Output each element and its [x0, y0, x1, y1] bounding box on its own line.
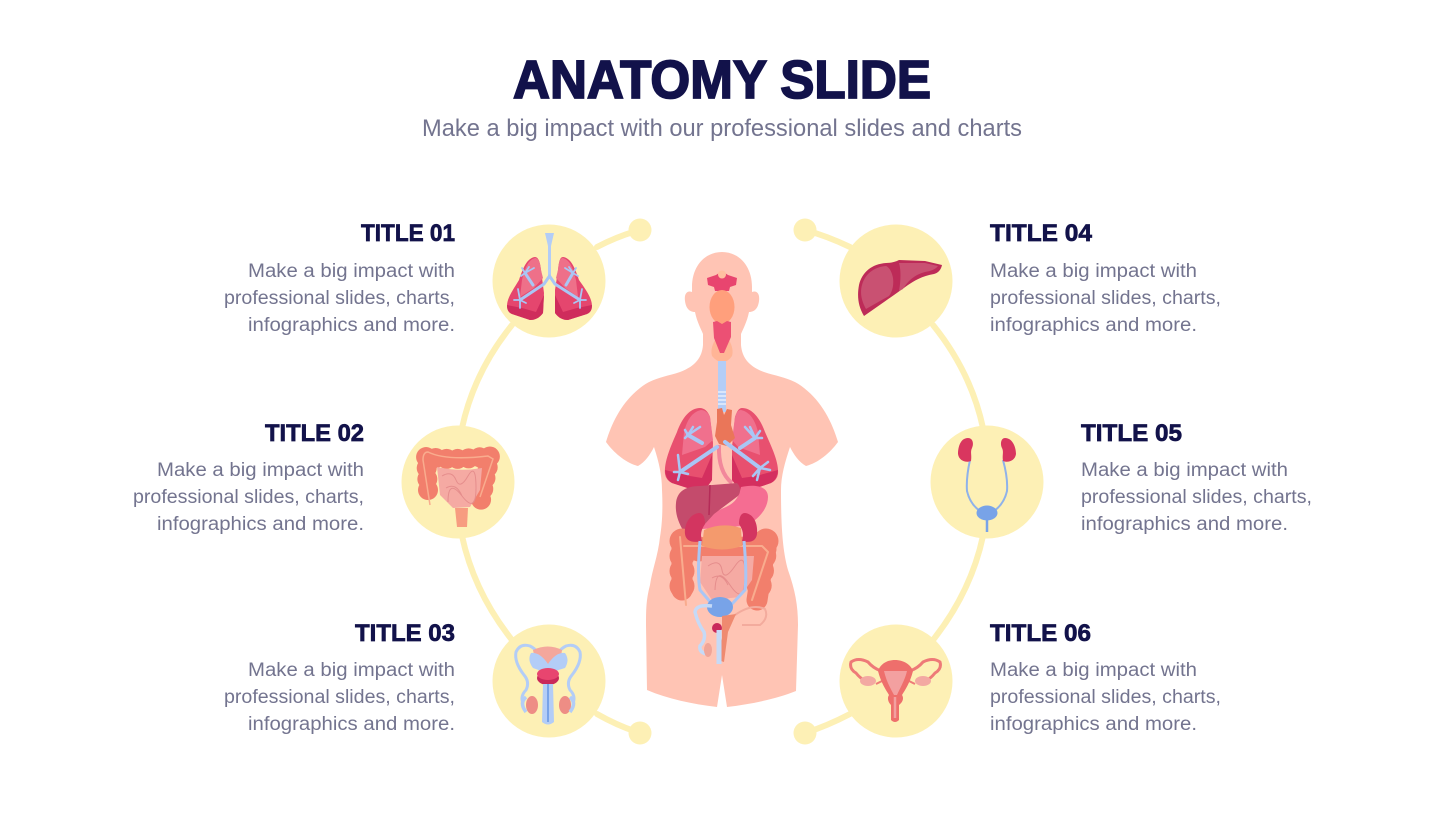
item 01 text: Make a big impact with: [248, 261, 455, 282]
item 02 text: [133, 420, 364, 535]
item 04: liver: [840, 224, 952, 338]
ureters: [698, 541, 746, 604]
central anatomy figure: [606, 252, 838, 707]
icon: uterus: [851, 660, 940, 722]
item 01 text: professional slides, charts,: [224, 288, 455, 309]
badge 03: [492, 624, 606, 738]
pituitary gland: [707, 270, 737, 291]
item 05 text: TITLE 05: [1081, 420, 1182, 447]
item 02: colon: [402, 426, 514, 538]
item 06 text: [990, 620, 1221, 735]
badge 04: [840, 224, 952, 338]
item 04 text: infographics and more.: [990, 315, 1197, 336]
item 05 text: infographics and more.: [1081, 514, 1288, 535]
item 04 text: [990, 220, 1221, 336]
icon: lungs: [507, 233, 592, 320]
pancreas: [702, 525, 742, 550]
item 05 text: professional slides, charts,: [1081, 487, 1312, 508]
item 04 text: TITLE 04: [990, 220, 1093, 247]
body silhouette: [606, 252, 838, 707]
item 03 text: [224, 620, 455, 735]
badge 05: [930, 426, 1044, 538]
aorta: [719, 445, 732, 483]
item 01 text: infographics and more.: [248, 315, 455, 336]
item 06 text: professional slides, charts,: [990, 687, 1221, 708]
small intestine: [700, 556, 754, 600]
subtitle: Make a big impact with our professional slides and charts: [422, 115, 1022, 142]
icon: male reproductive organs: [516, 645, 580, 724]
item 03: male reproductive system: [492, 624, 606, 738]
item 06 text: infographics and more.: [990, 714, 1197, 735]
item 01 text: TITLE 01: [361, 220, 455, 247]
trachea: [718, 361, 726, 412]
icon: intestines: [423, 452, 493, 527]
badge 06: [840, 624, 952, 738]
item 03 text: professional slides, charts,: [224, 687, 455, 708]
throat: [710, 290, 734, 362]
item 02 text: TITLE 02: [265, 420, 364, 447]
connector ring: right: [794, 218, 983, 744]
connector ring: left: [462, 218, 652, 744]
colon: [680, 537, 768, 605]
item 06 text: Make a big impact with: [990, 660, 1197, 681]
icon: kidneys and bladder: [958, 438, 1016, 532]
title: ANATOMY SLIDE: [513, 50, 931, 110]
item 04 text: Make a big impact with: [990, 261, 1197, 282]
item 03 text: Make a big impact with: [248, 660, 455, 681]
badge 01: [492, 224, 606, 338]
item 03 text: infographics and more.: [248, 714, 455, 735]
reproductive organs: [695, 606, 766, 664]
item 02 text: infographics and more.: [157, 514, 364, 535]
lungs: [665, 408, 778, 493]
item 06: female reproductive system: [840, 624, 952, 738]
icon: liver: [858, 260, 942, 316]
item 05: urinary system: [930, 426, 1044, 538]
stomach: [702, 486, 768, 529]
item 04 text: professional slides, charts,: [990, 288, 1221, 309]
item 02 text: professional slides, charts,: [133, 487, 364, 508]
badge 02: [402, 426, 514, 538]
liver: [676, 483, 740, 532]
bronchi: [674, 427, 770, 480]
item 05 text: Make a big impact with: [1081, 460, 1288, 481]
item 05 text: [1081, 420, 1312, 535]
bladder: [707, 597, 733, 617]
item 02 text: Make a big impact with: [157, 460, 364, 481]
item 01 text: [224, 220, 455, 336]
kidneys: [685, 513, 757, 542]
item 06 text: TITLE 06: [990, 620, 1091, 647]
heart: [715, 408, 735, 446]
item 01: lungs: [492, 224, 606, 338]
item 03 text: TITLE 03: [355, 620, 455, 647]
